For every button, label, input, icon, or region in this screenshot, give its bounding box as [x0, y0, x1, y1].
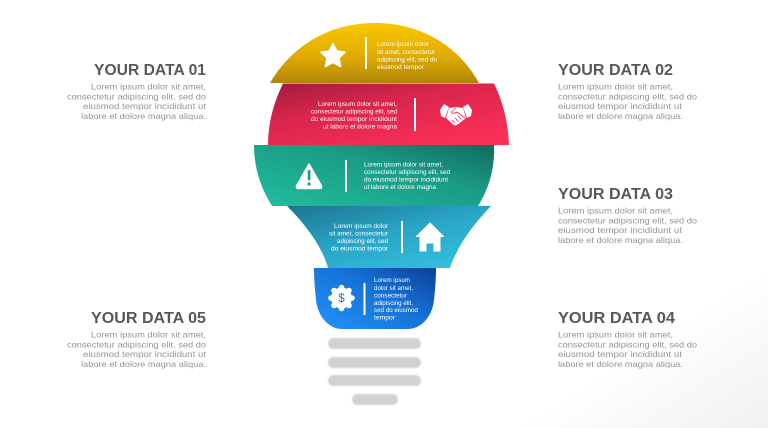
text block: YOUR DATA 02: YOUR DATA 02: [558, 62, 673, 79]
bulb segment 4: cyan neck: [287, 206, 491, 268]
text: red segment: consectetur adipiscing elit, sed: [311, 110, 397, 116]
text block: YOUR DATA 03: labore et dolore magna aliqua.: [558, 235, 683, 245]
text block: YOUR DATA 05: Lorem ipsum dolor sit amet,: [91, 330, 206, 340]
text block: YOUR DATA 02: labore et dolore magna aliqua.: [558, 111, 683, 121]
text: teal segment: do eiusmod tempor incididunt: [364, 178, 448, 184]
text: red segment: do eiusmod tempor incididunt: [311, 117, 397, 123]
text: yellow segment: adipiscing elit, sed do: [377, 58, 438, 64]
text block: YOUR DATA 05: consectetur adipiscing elit, sed do: [67, 340, 206, 350]
text: red segment: ut labore et dolore magna: [323, 124, 398, 130]
icon: gear with dollar sign: $: [338, 293, 345, 305]
text: blue segment: sed do eiusmod: [374, 308, 418, 314]
bulb segment 5: blue base: [314, 268, 436, 329]
text: blue segment: consectetur: [374, 294, 407, 300]
text block: YOUR DATA 01: labore et dolore magna aliqua.: [81, 111, 206, 121]
text: yellow segment: [377, 42, 438, 71]
bulb screw base: grey bars: [328, 338, 421, 405]
text block: YOUR DATA 01: YOUR DATA 01: [94, 62, 206, 79]
icon: star: [321, 44, 345, 66]
text block: YOUR DATA 02: consectetur adipiscing elit, sed do: [558, 92, 697, 102]
text block: YOUR DATA 05: YOUR DATA 05: [91, 310, 206, 327]
text block: YOUR DATA 02: Lorem ipsum dolor sit amet,: [558, 82, 673, 92]
text: teal segment: consectetur adipiscing elit, sed: [364, 170, 450, 176]
text: cyan segment: adipiscing elit, sed: [337, 239, 388, 245]
text block: YOUR DATA 01: eiusmod tempor incididunt ut: [83, 101, 207, 111]
text: teal segment: [364, 162, 450, 191]
text block: YOUR DATA 02: eiusmod tempor incididunt ut: [558, 101, 683, 111]
text: cyan segment: Lorem ipsum dolor: [334, 224, 388, 230]
text block: YOUR DATA 04: YOUR DATA 04: [558, 310, 675, 327]
text: yellow segment: Lorem ipsum dolor: [377, 42, 429, 48]
text: blue segment: dolor sit amet,: [374, 286, 413, 292]
text: blue segment: [374, 278, 418, 322]
text: red segment: [311, 102, 398, 130]
icon: warning triangle: [296, 164, 322, 188]
icon: handshake: [440, 104, 472, 125]
text: yellow segment: eiusmod tempor: [377, 65, 424, 71]
text block: YOUR DATA 05: eiusmod tempor incididunt ut: [83, 349, 207, 359]
text block: YOUR DATA 05: [67, 310, 207, 369]
text: cyan segment: do eiusmod tempor: [331, 246, 388, 252]
text: blue segment: Lorem ipsum: [374, 278, 410, 284]
text block: YOUR DATA 05: labore et dolore magna aliqua.: [81, 359, 206, 369]
text block: YOUR DATA 03: [558, 186, 697, 245]
text block: YOUR DATA 01: Lorem ipsum dolor sit amet,: [91, 82, 206, 92]
text block: YOUR DATA 01: consectetur adipiscing elit, sed do: [67, 92, 206, 102]
text: cyan segment: sit amet, consectetur: [329, 232, 388, 238]
icon: house: [416, 223, 444, 251]
text block: YOUR DATA 03: Lorem ipsum dolor sit amet,: [558, 206, 673, 216]
bulb segment 2: red band: [268, 84, 509, 145]
text block: YOUR DATA 04: eiusmod tempor incididunt ut: [558, 349, 683, 359]
text block: YOUR DATA 04: labore et dolore magna aliqua.: [558, 359, 683, 369]
text: teal segment: Lorem ipsum dolor sit amet,: [364, 162, 443, 168]
text block: YOUR DATA 02: [558, 62, 697, 121]
text block: YOUR DATA 04: [558, 310, 697, 369]
text: blue segment: adipiscing elit,: [374, 301, 413, 307]
text: red segment: Lorem ipsum dolor sit amet,: [318, 102, 397, 108]
text: yellow segment: sit amet, consectetur: [377, 50, 435, 56]
text: cyan segment: [329, 224, 388, 252]
bulb segment 3: teal band: [254, 145, 494, 206]
text block: YOUR DATA 04: Lorem ipsum dolor sit amet,: [558, 330, 673, 340]
text: blue segment: tempor: [374, 316, 395, 322]
text block: YOUR DATA 01: [67, 62, 207, 121]
text block: YOUR DATA 03: eiusmod tempor incididunt ut: [558, 225, 683, 235]
text block: YOUR DATA 04: consectetur adipiscing elit, sed do: [558, 340, 697, 350]
text block: YOUR DATA 03: consectetur adipiscing elit, sed do: [558, 216, 697, 226]
bulb segment 1: yellow dome: [270, 23, 479, 83]
text: teal segment: ut labore et dolore magna: [364, 185, 437, 191]
text block: YOUR DATA 03: YOUR DATA 03: [558, 186, 673, 203]
